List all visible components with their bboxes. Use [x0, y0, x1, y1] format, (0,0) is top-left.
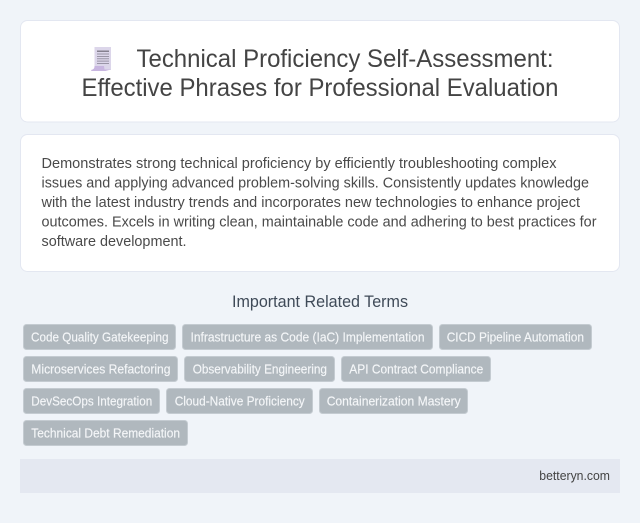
tag: technical debt remediation: Technical Debt Remediation [31, 426, 180, 440]
description panel [20, 134, 620, 272]
tag: infrastructure as code: Infrastructure as Code (IaC) Implementation [190, 330, 425, 344]
tag: containerization mastery [320, 388, 468, 414]
title: Technical Proficiency Self-Assessment: [136, 45, 554, 73]
tag: devsecops integration [24, 388, 160, 414]
tag: cloud-native proficiency [166, 388, 312, 414]
footer bar [20, 459, 620, 493]
tag: devsecops integration: DevSecOps Integration [31, 394, 152, 408]
tag: microservices refactoring [24, 356, 178, 382]
footer text: site name: betteryn.com [539, 469, 610, 483]
title [82, 45, 558, 102]
description text: Demonstrates strong technical proficiency by efficiently troubleshooting complex [42, 156, 557, 172]
tag: infrastructure as code [182, 324, 432, 350]
tag list [24, 324, 592, 446]
description text: outcomes. Excels in writing clean, maintainable code and adhering to best practices for [42, 214, 597, 230]
tag: code quality gatekeeping: Code Quality Gatekeeping [31, 330, 169, 344]
tag: containerization mastery: Containerization Mastery [327, 394, 461, 408]
title: Effective Phrases for Professional Evaluation [82, 74, 558, 102]
description text: software development. [42, 234, 186, 250]
tag: observability engineering [184, 356, 334, 382]
heading: important related terms: Important Related Terms [232, 293, 408, 311]
description text [41, 156, 597, 250]
icon: scroll document [91, 47, 111, 71]
tag: code quality gatekeeping [24, 324, 176, 350]
tag: cicd pipeline automation: CICD Pipeline Automation [447, 330, 584, 344]
tag: microservices refactoring: Microservices Refactoring [31, 362, 171, 376]
description text: with the latest industry trends and incorporates new technologies to enhance project [41, 195, 580, 211]
tag: api contract compliance: API Contract Compliance [349, 362, 483, 376]
tag: observability engineering: Observability Engineering [193, 362, 327, 376]
header panel [20, 20, 620, 122]
description text: issues and applying advanced problem-solving skills. Consistently updates knowledge [42, 176, 589, 192]
tag: cloud-native proficiency: Cloud-Native Proficiency [175, 394, 305, 408]
tag: api contract compliance [342, 356, 490, 382]
tag: technical debt remediation [24, 420, 188, 446]
tag: cicd pipeline automation [440, 324, 592, 350]
